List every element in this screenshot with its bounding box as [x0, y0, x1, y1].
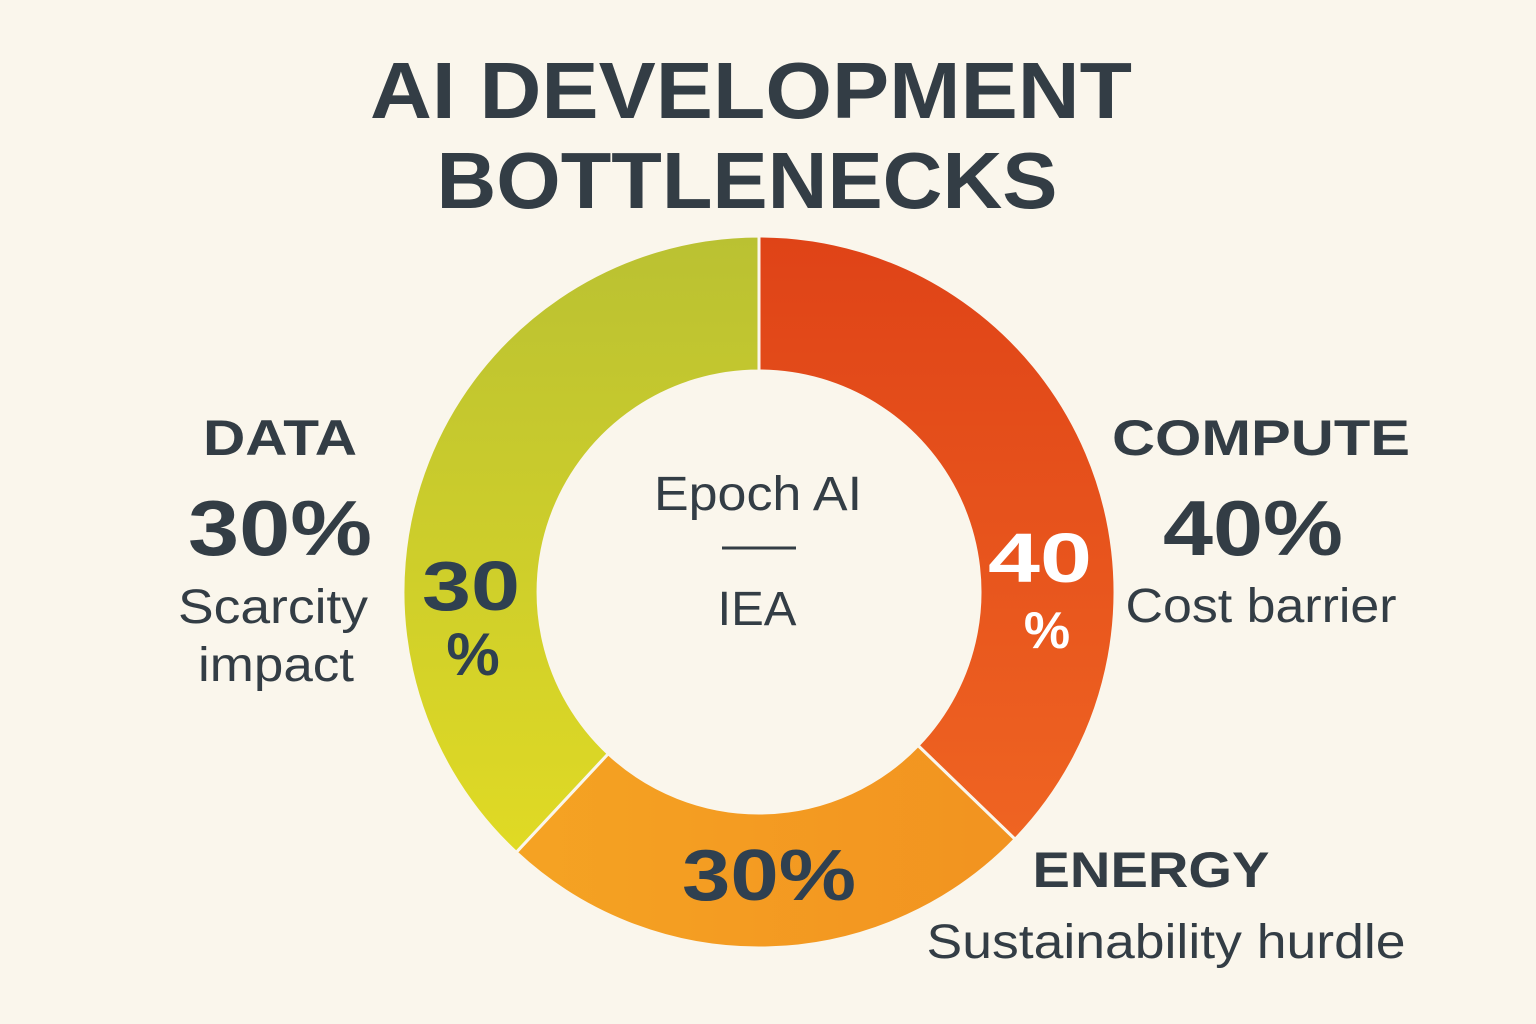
- ring label: data 30%: [422, 547, 520, 688]
- label: energy: Sustainability hurdle: [926, 916, 1406, 969]
- label: data: DATA: [203, 410, 357, 466]
- label: compute: [1112, 410, 1410, 633]
- label: energy: ENERGY: [1032, 842, 1270, 898]
- label: data: 30%: [188, 484, 372, 572]
- label: data: impact: [198, 639, 354, 692]
- label: compute: Cost barrier: [1126, 580, 1397, 633]
- label: data: [178, 410, 372, 692]
- center sources: [654, 468, 862, 636]
- label: data: Scarcity: [178, 581, 368, 634]
- ring label: compute 40%: %: [1024, 602, 1070, 660]
- ring label: compute 40%: 40: [988, 519, 1092, 597]
- ring label: data 30%: 30: [422, 547, 520, 625]
- ring label: compute 40%: [988, 519, 1092, 660]
- donut chart: [403, 236, 1115, 948]
- segment: data: [403, 236, 759, 852]
- segment: energy: [516, 746, 1015, 948]
- title: AI DEVELOPMENT: [370, 46, 1132, 135]
- label: energy: [926, 842, 1406, 969]
- ring label: data 30%: %: [446, 621, 500, 688]
- ring label: energy 30%: 30%: [682, 836, 856, 916]
- center sources: IEA: [718, 583, 796, 636]
- label: compute: 40%: [1163, 484, 1343, 572]
- title: BOTTLENECKS: [436, 136, 1058, 225]
- title: [370, 46, 1132, 225]
- label: compute: COMPUTE: [1112, 410, 1410, 466]
- segment: compute: [759, 236, 1115, 839]
- center sources: Epoch AI: [654, 468, 862, 521]
